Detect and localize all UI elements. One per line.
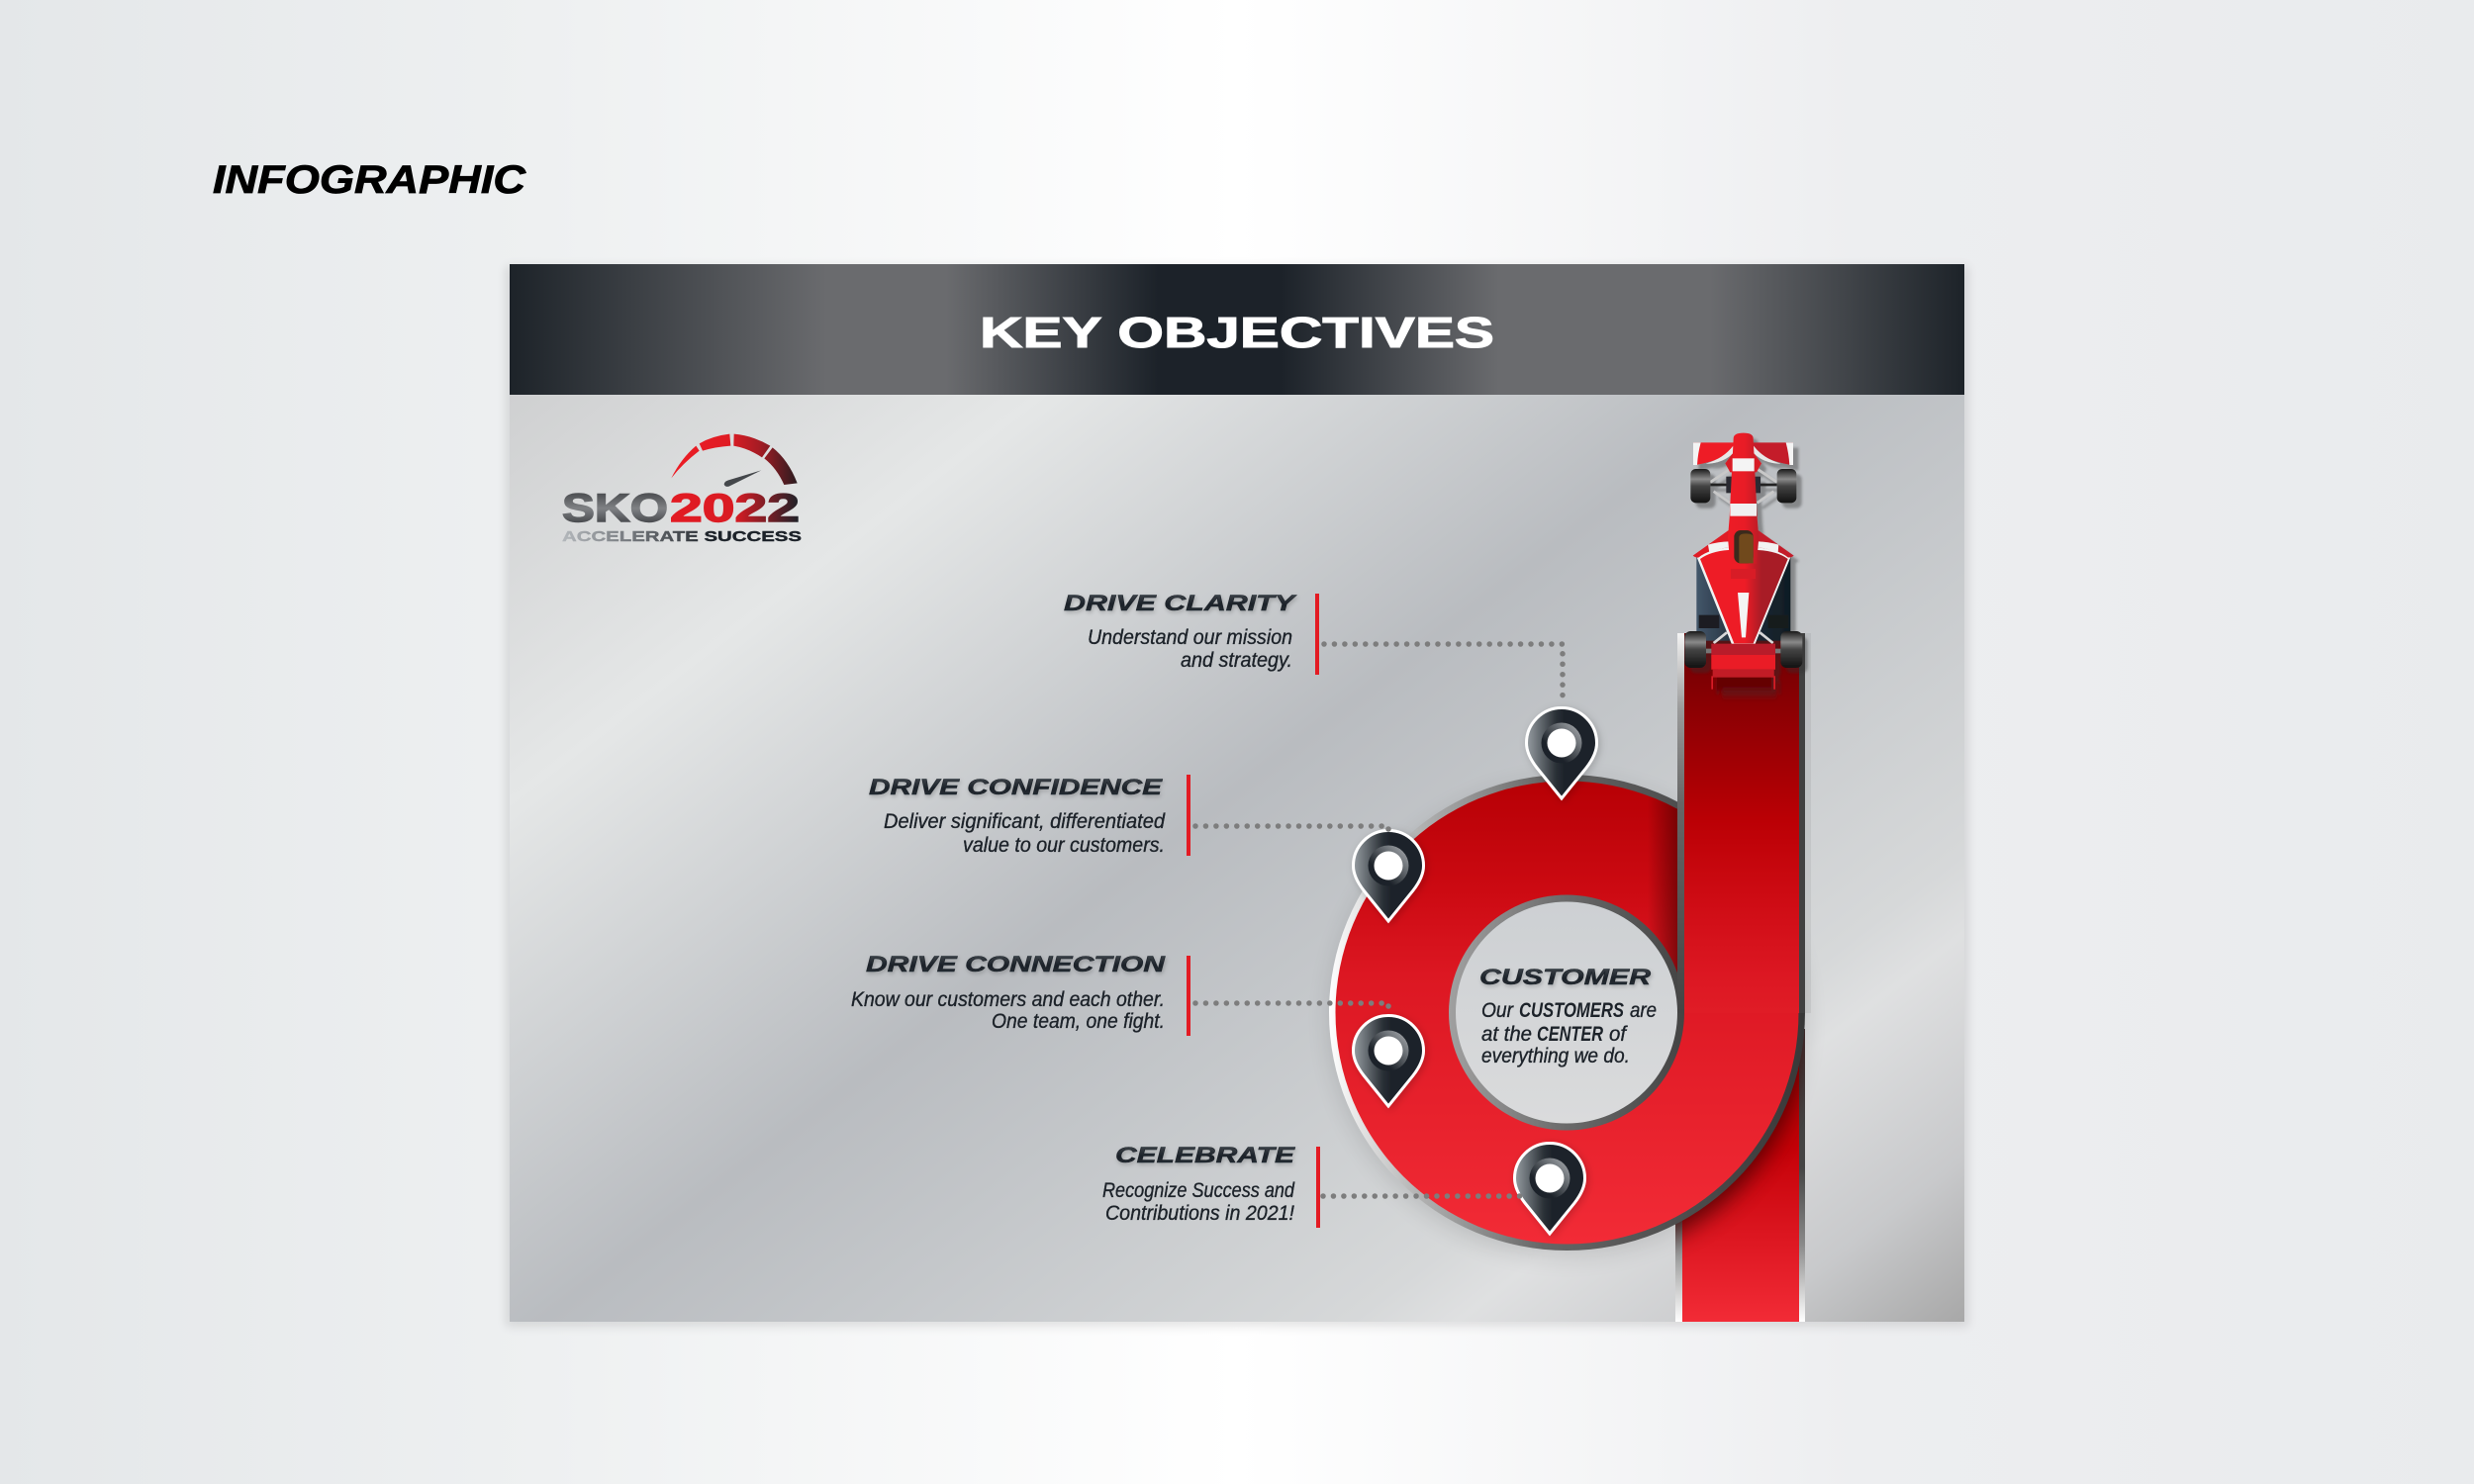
dotted connector: drive confidence bbox=[1195, 826, 1391, 832]
label: INFOGRAPHIC: INFOGRAPHIC bbox=[213, 158, 526, 202]
heading: DRIVE CONNECTION bbox=[866, 952, 1166, 976]
title: KEY OBJECTIVES: KEY OBJECTIVES bbox=[980, 309, 1494, 357]
description bbox=[884, 810, 1166, 857]
red bar bbox=[1315, 594, 1319, 675]
description bbox=[851, 988, 1165, 1033]
red bar bbox=[1187, 956, 1190, 1036]
logo text: 2022: 2022 bbox=[670, 487, 800, 530]
customer description: at the bbox=[1481, 1023, 1532, 1046]
description: Understand our mission bbox=[1088, 626, 1292, 649]
icon: map pin 2 bbox=[1354, 831, 1423, 921]
customer description: Our bbox=[1481, 999, 1514, 1022]
logo tagline: ACCELERATE SUCCESS bbox=[562, 528, 802, 545]
customer description bbox=[1481, 999, 1657, 1067]
icon: map pin 3 bbox=[1354, 1015, 1423, 1106]
header bar bbox=[510, 264, 1964, 395]
center text bbox=[1479, 965, 1657, 1067]
description: Recognize Success and bbox=[1102, 1179, 1295, 1202]
description: and strategy. bbox=[1181, 649, 1292, 672]
dotted connector: drive clarity bbox=[1324, 644, 1563, 696]
heading: CUSTOMER: CUSTOMER bbox=[1479, 965, 1651, 989]
heading: CELEBRATE bbox=[1115, 1143, 1296, 1167]
description bbox=[1088, 626, 1292, 672]
customer description: everything we do. bbox=[1481, 1045, 1630, 1067]
track lower section bbox=[1675, 1029, 1805, 1322]
customer description: of bbox=[1609, 1023, 1628, 1046]
description: value to our customers. bbox=[963, 834, 1165, 857]
description: Deliver significant, differentiated bbox=[884, 810, 1166, 833]
description: Know our customers and each other. bbox=[851, 988, 1165, 1011]
logo: SKO 2022 Accelerate Success bbox=[562, 434, 802, 545]
center circle: customer bbox=[1449, 894, 1684, 1130]
dotted connector: drive connection bbox=[1195, 1003, 1391, 1009]
customer description: CENTER bbox=[1537, 1023, 1604, 1046]
track upper section bbox=[1677, 633, 1811, 1013]
icon: speedometer gauge bbox=[671, 434, 798, 487]
item: drive confidence bbox=[869, 775, 1190, 857]
customer description: CUSTOMERS bbox=[1519, 999, 1624, 1022]
red bar bbox=[1316, 1147, 1320, 1228]
item: drive clarity bbox=[1064, 591, 1319, 675]
dotted connector: celebrate bbox=[1323, 1193, 1521, 1199]
ring: road circle bbox=[1329, 772, 1805, 1251]
panel: key objectives bbox=[506, 264, 1968, 1327]
item: drive connection bbox=[851, 952, 1190, 1036]
panel shadow bbox=[506, 266, 1968, 1327]
icon: map pin 1 bbox=[1526, 708, 1597, 798]
item: celebrate bbox=[1102, 1143, 1320, 1228]
icon: race car bbox=[1684, 433, 1802, 696]
icon: map pin 4 bbox=[1514, 1144, 1585, 1234]
heading: DRIVE CONFIDENCE bbox=[869, 775, 1164, 799]
description: Contributions in 2021! bbox=[1105, 1202, 1294, 1225]
description bbox=[1102, 1179, 1295, 1225]
logo text: SKO: SKO bbox=[562, 487, 668, 530]
customer description: are bbox=[1630, 999, 1657, 1022]
ring shadow bbox=[1324, 890, 1810, 1262]
description: One team, one fight. bbox=[992, 1010, 1165, 1033]
heading: DRIVE CLARITY bbox=[1064, 591, 1297, 615]
red bar bbox=[1187, 775, 1190, 856]
panel background bbox=[510, 395, 1964, 1322]
